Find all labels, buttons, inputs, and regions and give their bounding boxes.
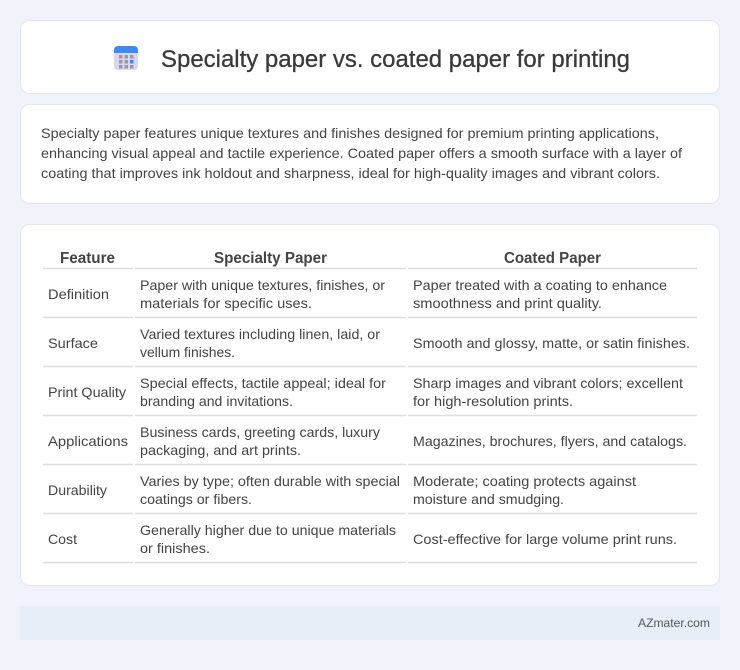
row: durability: coatings or fibers. [140,491,252,507]
row: print quality: branding and invitations. [140,393,293,409]
row: applications [43,424,697,464]
row: cost: Cost-effective for large volume print runs. [413,531,677,547]
row: applications: Business cards, greeting cards, luxury [140,424,380,440]
panel: introduction [20,104,720,204]
row: definition: smoothness and print quality. [413,295,602,311]
panel: title card [20,20,720,94]
row: definition: Definition [48,286,109,302]
row: definition: Paper treated with a coating to enhance [413,277,667,293]
intro text: enhancing visual appeal and tactile experience. Coated paper offers a smooth surface with a layer of [41,145,682,161]
icon: calendar [114,46,138,70]
row: durability [43,473,697,514]
table header: Specialty Paper [214,250,327,267]
row: applications: packaging, and art prints. [140,442,301,458]
row: surface: vellum finishes. [140,344,235,360]
title: Specialty paper vs. coated paper for printing [161,46,630,73]
row: durability: Durability [48,482,107,498]
row: durability: moisture and smudging. [413,491,564,507]
row: cost: or finishes. [140,540,210,556]
row: definition: Paper with unique textures, finishes, or [140,277,385,293]
row: surface: Smooth and glossy, matte, or satin finishes. [413,335,690,351]
row: cost: Cost [48,531,77,547]
row: surface: Surface [48,335,98,351]
footer brand: AZmater.com [638,616,710,630]
row: cost [43,522,697,562]
panel: comparison table [20,224,720,586]
row: definition: materials for specific uses. [140,295,312,311]
row: print quality: Print Quality [48,384,126,400]
intro text: Specialty paper features unique textures and finishes designed for premium printing applications, [41,125,659,141]
table header [43,250,697,268]
row: definition [43,277,697,318]
row: print quality: Sharp images and vibrant colors; excellent [413,375,683,391]
row: durability: Moderate; coating protects against [413,473,636,489]
row: print quality: for high-resolution prints. [413,393,573,409]
row: applications: Magazines, brochures, flyers, and catalogs. [413,433,687,449]
row: surface: Varied textures including linen, laid, or [140,326,380,342]
row: print quality [43,375,697,416]
table header: Feature [60,250,115,267]
row: surface [43,326,697,366]
intro text [41,125,682,181]
row: durability: Varies by type; often durable with special [140,473,400,489]
row: print quality: Special effects, tactile appeal; ideal for [140,375,386,391]
row: cost: Generally higher due to unique materials [140,522,396,538]
footer bar [20,606,720,640]
row: applications: Applications [48,433,128,449]
table header: Coated Paper [504,250,601,267]
intro text: coating that improves ink holdout and sharpness, ideal for high-quality images and vibrant colors. [41,165,660,181]
